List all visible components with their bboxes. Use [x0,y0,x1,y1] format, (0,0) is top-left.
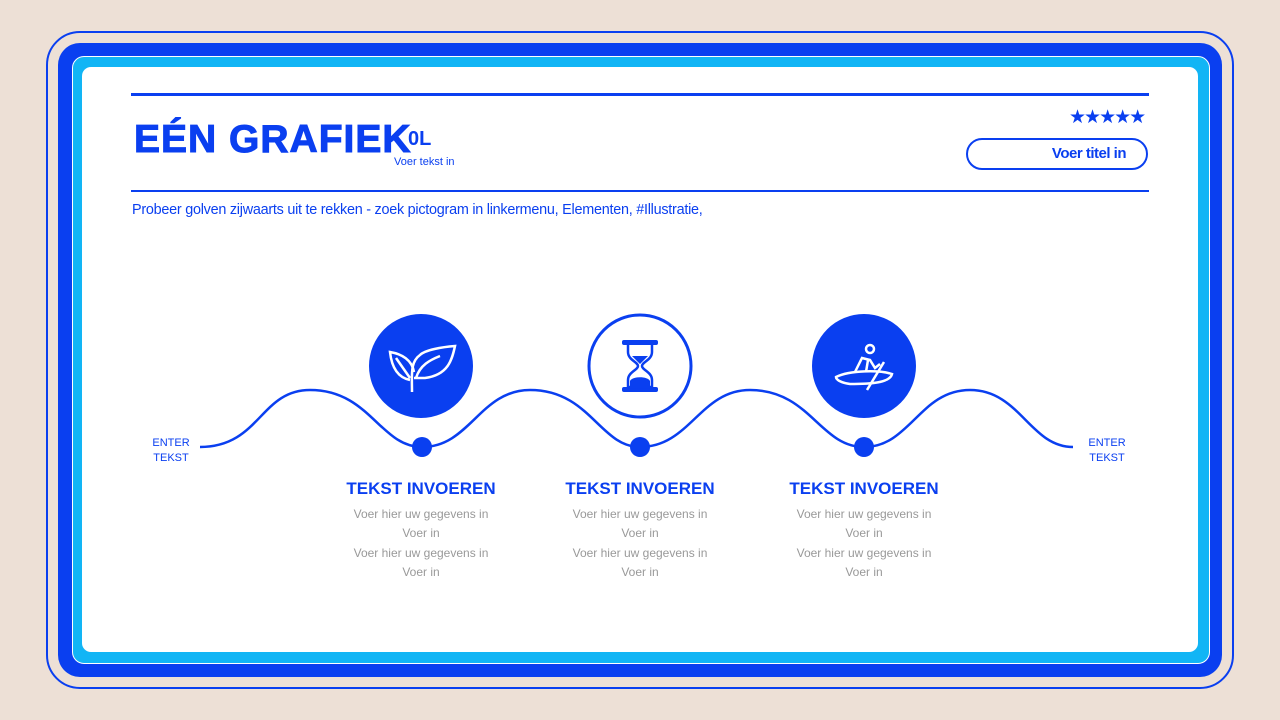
step 2 text: Voer hier uw gegevens in [573,546,707,560]
left label: TEKST [153,452,189,464]
icon: hourglass [589,315,691,417]
step 1 text [346,479,496,579]
cyan frame [72,56,1210,664]
left label: ENTER [152,437,190,449]
right label: ENTER [1088,437,1126,449]
stars: ★★★★★ [1069,107,1144,128]
step 3 text: Voer in [845,526,883,540]
step 1 text: Voer in [402,526,440,540]
step 1 text: Voer in [402,565,440,579]
rule 2 [131,190,1149,192]
step 1 text: TEKST INVOEREN [346,479,496,498]
right label [1088,437,1126,464]
icon: leaf [369,314,473,418]
step 2 text: Voer in [621,565,659,579]
subtitle small: Voer tekst in [394,156,455,168]
step 2 text: TEKST INVOEREN [565,479,715,498]
step 2 text: Voer in [621,526,659,540]
step 3 text: Voer hier uw gegevens in [797,507,931,521]
step 1 text: Voer hier uw gegevens in [354,546,488,560]
step 3 text: Voer hier uw gegevens in [797,546,931,560]
step 2 text: Voer hier uw gegevens in [573,507,707,521]
title suffix: 0L [408,128,431,150]
top rule [131,93,1149,96]
title button: Voer titel in [1052,145,1126,162]
step 2 text [565,479,715,579]
step 3 text: TEKST INVOEREN [789,479,939,498]
step 3 text [789,479,939,579]
step 3 text: Voer in [845,565,883,579]
icon: rower [812,314,916,418]
left label [152,437,190,464]
description: Probeer golven zijwaarts uit te rekken - zoek pictogram in linkermenu, Elementen, #Illustratie, [132,202,703,218]
title button [966,138,1148,170]
title: EÉN GRAFIEK [134,118,412,161]
white card [82,67,1198,652]
step 1 text: Voer hier uw gegevens in [354,507,488,521]
right label: TEKST [1089,452,1125,464]
